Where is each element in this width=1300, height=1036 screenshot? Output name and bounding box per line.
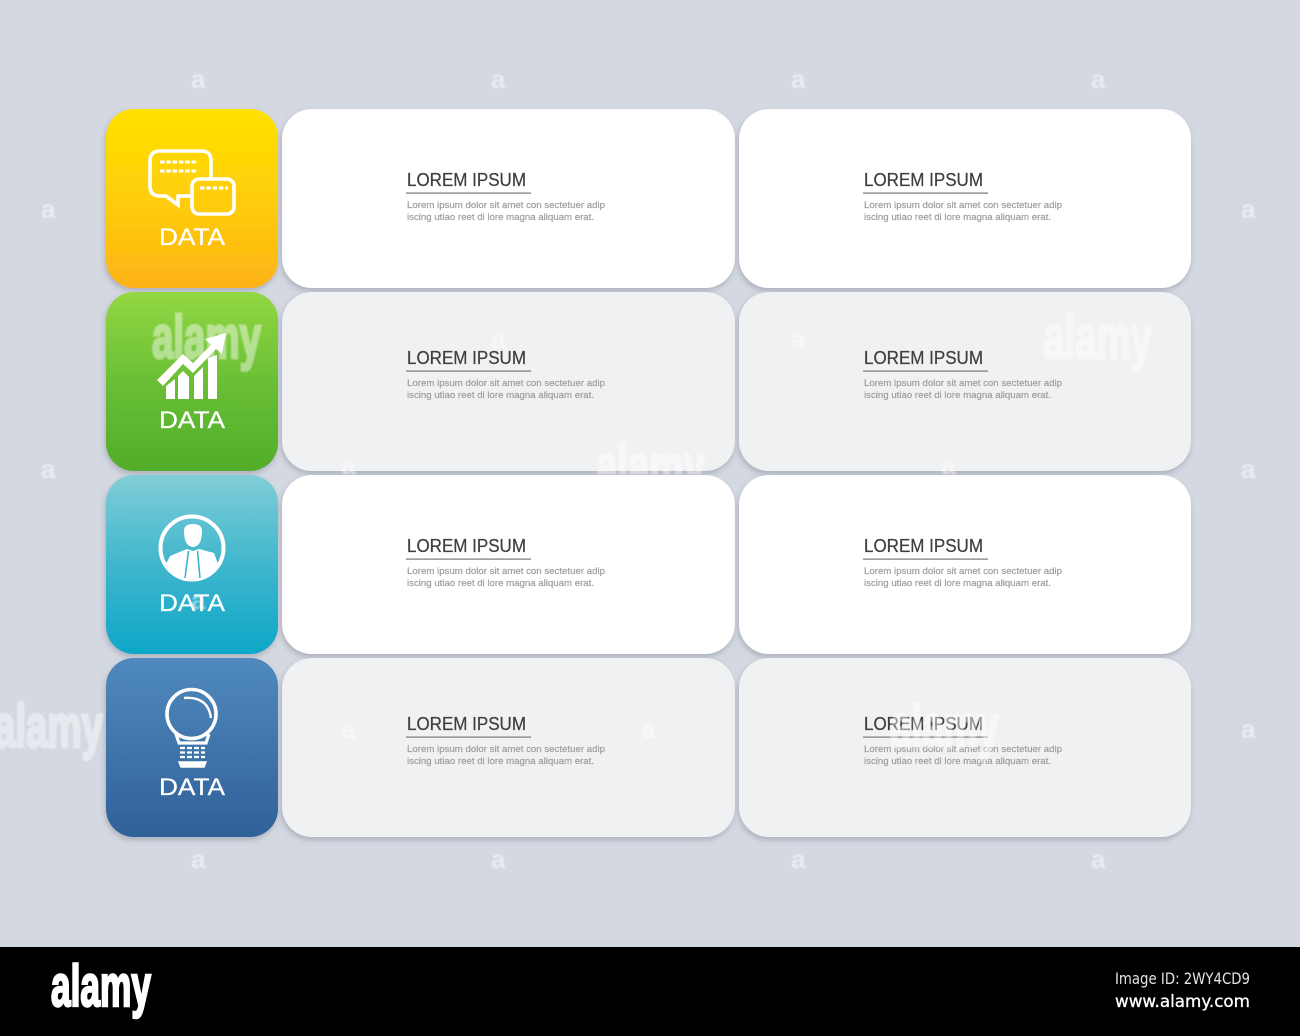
watermarks: a [1241,194,1256,224]
watermarks: a [491,64,506,94]
icon: light bulb [167,690,216,767]
watermarks: a [791,844,806,874]
watermarks: a [791,324,806,354]
icon: speech bubbles [150,151,234,214]
watermarks: a [491,844,506,874]
panel: row 1 left: Lorem ipsum dolor sit amet con sectetuer adip [407,199,605,210]
panel: row 3 left: Lorem ipsum dolor sit amet con sectetuer adip [407,565,605,576]
panel: row 2 left [282,292,735,471]
panel: row 4 left: iscing utiao reet di lore magna aliquam erat. [407,755,594,766]
panel: row 2 right: iscing utiao reet di lore magna aliquam erat. [864,389,1051,400]
watermarks: a [491,324,506,354]
watermarks: a [341,450,356,480]
panel: row 2 right: Lorem ipsum dolor sit amet con sectetuer adip [864,377,1062,388]
panel: row 3 left: iscing utiao reet di lore magna aliquam erat. [407,577,594,588]
panel: row 3 left [282,475,735,654]
watermarks: a [1241,454,1256,484]
watermarks: a [41,194,56,224]
panel: row 1 right: Lorem ipsum dolor sit amet con sectetuer adip [864,199,1062,210]
watermarks: a [191,844,206,874]
panel: row 3 right [739,475,1191,654]
panel: row 1 left [282,109,735,288]
watermarks: a [341,714,356,744]
watermarks: a [41,454,56,484]
panel: row 2 left: LOREM IPSUM [407,348,526,368]
tab: green data: DATA [159,407,225,434]
panel: row 2 left: Lorem ipsum dolor sit amet con sectetuer adip [407,377,605,388]
panel: row 2 left: iscing utiao reet di lore magna aliquam erat. [407,389,594,400]
panel: row 4 left: LOREM IPSUM [407,714,526,734]
panel: row 2 right: LOREM IPSUM [864,348,983,368]
watermarks: a [791,64,806,94]
watermarks: a [191,64,206,94]
panel: row 1 left: LOREM IPSUM [407,170,526,190]
tab: green data [106,292,278,471]
panel: row 3 right: iscing utiao reet di lore magna aliquam erat. [864,577,1051,588]
panel: row 4 right: Lorem ipsum dolor sit amet con sectetuer adip [864,743,1062,754]
tab: teal data: DATA [159,590,225,617]
panel: row 4 right [739,658,1191,837]
panel: row 4 right: iscing utiao reet di lore magna aliquam erat. [864,755,1051,766]
image id: Image ID: 2WY4CD9 [1115,969,1250,988]
panel: row 2 right [739,292,1191,471]
watermarks: alamy [890,693,999,760]
panel: row 4 right: LOREM IPSUM [864,714,983,734]
panel: row 1 right [739,109,1191,288]
watermarks: alamy [1043,304,1152,371]
watermarks: a [1091,64,1106,94]
watermarks: alamy [152,304,261,371]
watermarks [0,64,1256,874]
watermarks: a [191,585,206,615]
panel: row 4 left: Lorem ipsum dolor sit amet con sectetuer adip [407,743,605,754]
footer bar [0,947,1300,1036]
panel: row 1 right: LOREM IPSUM [864,170,983,190]
tab: yellow data [106,109,278,288]
icon: businessman [160,516,224,580]
panel: row 1 left: iscing utiao reet di lore magna aliquam erat. [407,211,594,222]
watermarks: alamy [596,433,705,500]
website: www.alamy.com [1115,992,1250,1012]
icon: growth chart [157,333,226,399]
tab: blue data: DATA [159,774,225,801]
watermarks: a [1241,714,1256,744]
panel: row 1 right: iscing utiao reet di lore magna aliquam erat. [864,211,1051,222]
watermarks: a [941,450,956,480]
panel: row 3 right: LOREM IPSUM [864,536,983,556]
watermarks: a [641,714,656,744]
panel: row 4 left [282,658,735,837]
tab: teal data [106,475,278,654]
tab: blue data [106,658,278,837]
watermarks: a [1091,844,1106,874]
panel: row 3 right: Lorem ipsum dolor sit amet con sectetuer adip [864,565,1062,576]
tab: yellow data: DATA [159,224,225,251]
footer logo: alamy [51,954,151,1019]
panel: row 3 left: LOREM IPSUM [407,536,526,556]
